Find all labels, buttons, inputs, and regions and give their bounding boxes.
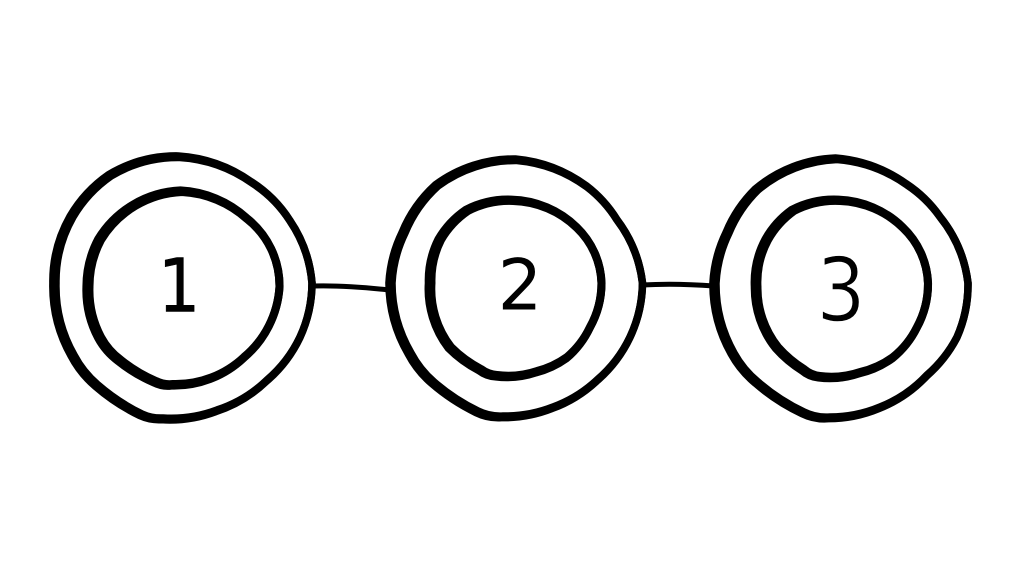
connector: circle 1 to circle 2 <box>312 286 389 290</box>
outer ring 2 <box>389 159 642 418</box>
number 2: 2 <box>498 244 542 326</box>
outer ring 1 <box>53 156 312 420</box>
connector: circle 2 to circle 3 <box>642 284 714 286</box>
inner ring 2 <box>429 200 602 377</box>
inner ring 3 <box>755 200 928 378</box>
number 1: 1 <box>158 243 200 329</box>
number 3: 3 <box>816 239 866 342</box>
step 1 circle <box>53 156 312 420</box>
outer ring 3 <box>713 158 968 419</box>
step 3 circle <box>713 158 968 419</box>
step 2 circle <box>389 159 642 418</box>
inner ring 1 <box>86 190 280 386</box>
